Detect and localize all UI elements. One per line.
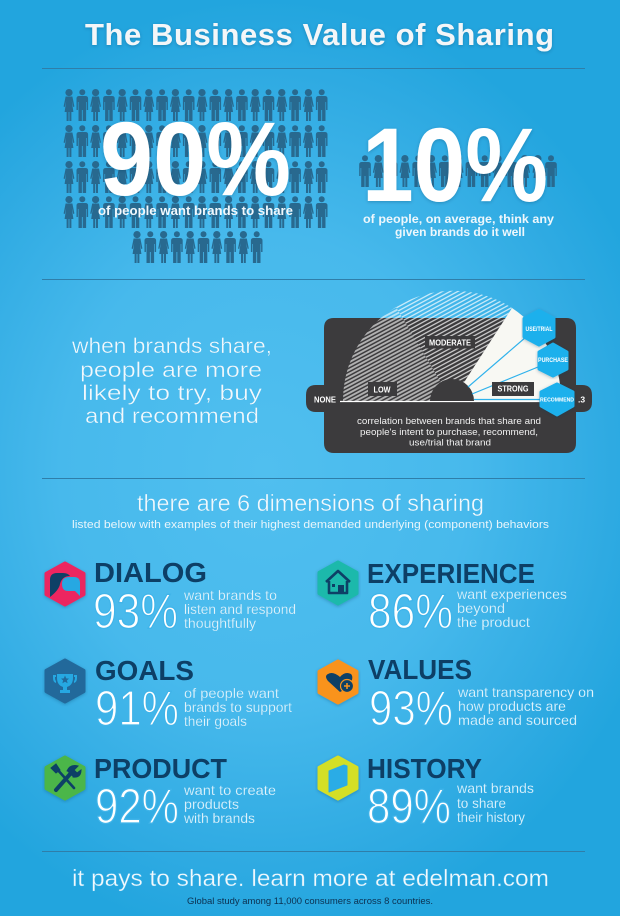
panel: experience [319,558,567,639]
heading: dialog: DIALOG [94,557,207,588]
label: low [368,382,397,396]
label: low: LOW [374,384,391,394]
text: product description [183,782,276,826]
title: The Business Value of Sharing [85,17,554,52]
heading: goals: GOALS [95,655,194,686]
icon: heart with plus [319,661,357,703]
text: experience description: beyond [457,600,505,616]
subheading: six dimensions: listed below with examples of their highest demanded underlying (component) behaviors [72,519,550,531]
caption: 10%: of people, on average, think any [363,214,555,226]
text: product description: want to create [183,782,276,798]
footer call to action: it pays to share. learn more at edelman.com [72,865,549,891]
text: experience description [456,586,567,630]
hex: recommend: RECOMMEND [540,398,574,404]
icon: house [319,562,357,604]
text: goals description [184,685,292,729]
hex: recommend [540,384,574,415]
hex: use/trial: USE/TRIAL [526,326,553,333]
chart: correlation gauge [306,291,592,453]
stat: 89%: 89% [367,780,451,834]
label: strong: STRONG [498,384,529,394]
label: none: NONE [314,394,336,404]
text block: when brands share: and recommend [85,405,259,428]
text: history description: want brands [456,780,534,796]
text block: when brands share: people are more [80,359,262,382]
big number: 90%: 90% [100,101,291,218]
gauge dark panel [306,318,592,453]
stat: 86%: 86% [368,585,453,639]
icon: book [319,757,357,799]
icon: trophy [46,660,84,702]
stat: 93%: 93% [93,585,178,639]
text: dialog description: want brands to [183,587,277,603]
connector lines [468,337,545,400]
text block: when brands share [71,335,272,428]
panel: goals [46,655,292,736]
caption: 90%: of people want brands to share [98,204,293,218]
stat: 92%: 92% [95,780,179,834]
text: values description: how products are [458,698,566,714]
text: history description: their history [457,809,525,825]
gauge sector: strong [452,308,561,401]
panel: 10 percent stat [359,107,557,239]
text block: when brands share: when brands share, [71,335,272,358]
heading: values: VALUES [368,654,472,685]
big number: 10%: 10% [362,107,548,224]
text: history description: to share [457,795,506,811]
gauge sector: moderate [396,291,512,401]
panel: history [319,753,534,834]
text: dialog description: listen and respond [184,601,296,617]
gauge hub [430,379,474,401]
heading: product: PRODUCT [94,753,227,784]
text: values description [457,684,594,728]
text: goals description: of people want [184,685,279,701]
stat: 91%: 91% [95,682,179,736]
text: goals description: their goals [184,713,247,729]
icon: tools [46,757,84,799]
text: product description: with brands [183,810,255,826]
gauge caption: use/trial that brand [409,438,491,448]
panel: product [46,753,276,834]
text block: when brands share: likely to try, buy [82,382,263,405]
hex: use/trial [524,310,554,345]
heading: six dimensions: there are 6 dimensions of sharing [137,490,484,516]
text: dialog description [183,587,296,631]
gauge caption: correlation between brands that share and [357,416,541,427]
label: strong [492,382,534,396]
label: .3: .3 [578,394,585,404]
text: experience description: want experiences [456,586,567,602]
text: values description: want transparency on [457,684,594,700]
hex: purchase [538,344,568,376]
caption: 10%: given brands do it well [395,227,525,239]
text: product description: products [184,796,239,812]
icon: speech bubbles [46,563,84,605]
panel: values [319,654,594,736]
hex: purchase: PURCHASE [538,357,568,364]
text: values description: made and sourced [458,712,577,728]
heading: history: HISTORY [367,753,482,784]
people row: 10 percent [359,155,557,187]
panel: 90 percent stat [64,89,327,263]
text: experience description: the product [457,614,530,630]
gauge caption: people's intent to purchase, recommend, [360,427,538,438]
footnote: Global study among 11,000 consumers across 8 countries. [187,896,433,907]
panel: dialog [46,557,296,639]
stat: 93%: 93% [369,682,453,736]
text: goals description: brands to support [184,699,292,715]
gauge sector: low [343,307,452,401]
text: dialog description: thoughtfully [184,615,256,631]
text: history description [456,780,534,825]
label: moderate: MODERATE [429,338,471,348]
heading: experience: EXPERIENCE [367,558,535,589]
people grid: 90 percent [64,89,327,263]
